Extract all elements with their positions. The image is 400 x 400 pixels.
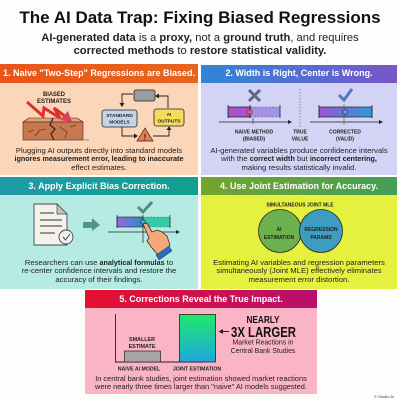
diagram: simultaneous joint MLE venn: ESTIMATION [264, 235, 295, 241]
text: panel 1 [15, 146, 184, 172]
bar chart: naive vs joint: JOINT ESTIMATION [173, 366, 221, 372]
callout: nearly 3x larger: Central Bank Studies [231, 348, 296, 355]
diagram: simultaneous joint MLE venn [258, 202, 342, 252]
diagram: simultaneous joint MLE venn: REGRESSION [304, 227, 338, 233]
heading: panel 4 [201, 177, 397, 195]
panel: true impact [85, 290, 317, 394]
label: true value line [292, 89, 309, 142]
text: panel 4: simultaneously (Joint MLE) effectively eliminates [216, 266, 382, 275]
diagram: simultaneous joint MLE venn: AI [276, 227, 282, 233]
text: panel 1: ignores measurement error, leading to inaccurate [15, 154, 183, 163]
text: panel 5 [95, 374, 307, 391]
callout: nearly 3x larger [218, 314, 296, 355]
heading: panel 2 [201, 65, 397, 83]
title: The AI Data Trap: Fixing Biased Regressions [19, 8, 381, 27]
text: panel 5: were nearly three times larger than "naive" AI models suggested. [95, 382, 307, 391]
text: panel 4: measurement error distortion. [249, 275, 349, 284]
callout: nearly 3x larger: Market Reactions in [233, 340, 294, 346]
diagram: standard models loop: MODELS [109, 120, 131, 126]
text: panel 3: Researchers can use analytical formulas to [25, 258, 173, 267]
label: true value line: TRUE [293, 130, 307, 136]
panel: width right center wrong [201, 65, 397, 175]
diagram: standard models loop: ! [144, 133, 146, 142]
text: panel 3 [22, 258, 176, 284]
bar chart: naive vs joint [116, 314, 221, 372]
subtitle: AI-generated data is a proxy, not a ground truth, and requires [41, 32, 359, 44]
bar chart: naive vs joint: NAIVE AI MODEL [118, 366, 161, 372]
bar chart: naive vs joint: SMALLER [129, 337, 155, 343]
heading: panel 3 [0, 177, 198, 195]
subtitle: corrected methods to restore statistical validity. [74, 45, 326, 57]
heading: panel 3: 3. Apply Explicit Bias Correction. [28, 181, 170, 191]
text: panel 3: re-center confidence intervals and restore the [22, 266, 176, 275]
chart: naive method interval: NAIVE METHOD [235, 130, 274, 136]
text: panel 1: Plugging AI outputs directly into standard models [16, 146, 182, 155]
text: panel 4: Estimating AI variables and regression parameters [213, 258, 385, 267]
heading: panel 5 [85, 290, 317, 308]
text: panel 2: AI-generated variables produce confidence intervals [210, 146, 388, 155]
heading: panel 4: 4. Use Joint Estimation for Accuracy. [220, 181, 378, 191]
text: panel 4 [213, 258, 385, 284]
arrow: to corrected interval [83, 218, 100, 231]
chart: corrected interval [310, 89, 383, 142]
text: panel 3: accuracy of their findings. [55, 275, 143, 284]
panel: explicit bias correction [0, 177, 198, 289]
diagram: simultaneous joint MLE venn: SIMULTANEOUS JOINT MLE [266, 202, 334, 208]
callout: nearly 3x larger: 3X LARGER [231, 324, 296, 341]
icon: document with check [34, 204, 73, 245]
chart: naive method interval [219, 90, 292, 142]
diagram: standard models loop [102, 90, 184, 142]
icon: biased estimates cracked block: ESTIMATES [37, 99, 71, 105]
text: panel 5: In central bank studies, joint estimation showed market reactions [95, 374, 307, 383]
bar chart: naive vs joint: ESTIMATE [129, 344, 156, 350]
chart: applied correction interval with hand [108, 202, 180, 260]
heading: panel 2: 2. Width is Right, Center is Wrong. [225, 68, 373, 78]
diagram: simultaneous joint MLE venn: PARAMS [310, 235, 332, 241]
heading: panel 1 [0, 64, 198, 83]
panel: naive two-step [0, 64, 198, 175]
chart: corrected interval: (VALID) [336, 136, 354, 142]
label: true value line: VALUE [292, 136, 309, 142]
arrow: biased downward [27, 102, 66, 118]
icon: biased estimates cracked block: BIASED [43, 92, 66, 98]
watermark: © Studio AI [374, 394, 394, 399]
diagram: standard models loop: STANDARD [106, 113, 133, 119]
subtitle [41, 32, 359, 57]
icon: pointing hand [143, 223, 170, 255]
text: panel 2: with the correct width but incorrect centering, [221, 154, 377, 163]
heading: panel 1: 1. Naive "Two-Step" Regressions are Biased. [3, 68, 195, 78]
callout: nearly 3x larger: NEARLY [246, 314, 280, 326]
chart: corrected interval: CORRECTED [329, 130, 361, 136]
text: panel 2: making results statistically invalid. [242, 163, 356, 172]
diagram: standard models loop: OUTPUTS [158, 118, 181, 124]
text: panel 2 [210, 146, 388, 172]
text: panel 1: effect estimates. [71, 163, 127, 172]
chart: naive method interval: (BIASED) [243, 136, 265, 142]
icon: biased estimates cracked block [23, 92, 89, 140]
heading: panel 5: 5. Corrections Reveal the True Impact. [119, 294, 283, 304]
panel: joint estimation [201, 177, 397, 289]
diagram: standard models loop: AI [167, 112, 172, 118]
